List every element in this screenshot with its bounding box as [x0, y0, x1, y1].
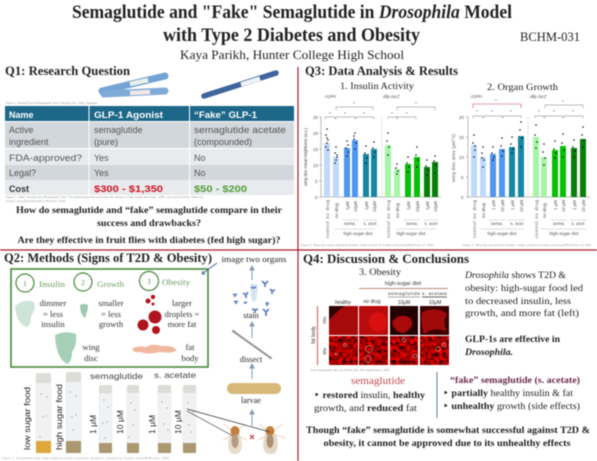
arrow to box	[202, 263, 217, 274]
bar chart: insulin activity: 5	[315, 179, 318, 184]
bar chart: insulin activity: s. acet	[425, 221, 438, 226]
research question text	[16, 205, 283, 246]
bar chart: insulin activity: 25	[313, 115, 318, 120]
comparison table: “Fake” GLP-1	[194, 110, 257, 120]
figure caption Q4: From photographs taken by Fredlet (20x, 40x magnification), 2025.	[311, 369, 390, 372]
bar chart: organ growth: 1 μM	[572, 200, 577, 210]
research question text: Are they effective in fruit flies with diabetes (fed high sugar)?	[18, 235, 281, 246]
bar chart: organ growth: control no drug	[534, 199, 539, 238]
icon: crossed flies	[187, 409, 286, 454]
icon: tweezers	[233, 331, 271, 358]
comparison table: Name	[9, 110, 34, 120]
panel: Q4 discussion and conclusions	[303, 251, 590, 449]
sign 2: growth	[74, 273, 125, 329]
semaglutide findings: semaglutide	[351, 376, 406, 387]
fat body micrograph grid: 10μM	[398, 300, 410, 306]
bar chart: insulin activity: 15	[313, 147, 318, 152]
vial labels: 10 μM	[173, 410, 183, 434]
sign 1: insulin: insulin	[41, 319, 65, 329]
project code: BCHM-031	[520, 30, 580, 44]
bar chart: organ growth: 5	[461, 175, 464, 180]
bar chart: insulin activity: *	[406, 111, 408, 116]
heading: Q3: Q3: Data Analysis & Results	[305, 63, 458, 78]
bar chart: organ growth: 10	[459, 155, 464, 160]
sign 3: obesity: 3	[147, 278, 151, 286]
discussion text	[464, 271, 583, 358]
bar chart: organ growth: control no drug	[472, 199, 477, 238]
comparison table: semaglutide	[94, 125, 143, 135]
bar chart: organ growth: rGPH	[471, 94, 483, 99]
bar chart: insulin activity: sema.	[406, 221, 418, 226]
discussion text: Drosophila.	[464, 348, 513, 358]
sign 3: obesity	[138, 272, 199, 334]
bar chart: insulin activity: 10μM	[353, 201, 358, 212]
bar chart: insulin activity: high-sugar diet	[343, 231, 373, 236]
semaglutide findings	[314, 376, 425, 414]
bar chart: organ growth: 15	[459, 135, 464, 140]
workflow labels	[222, 255, 286, 405]
title: Semaglutide and "Fake" Semaglutide in Drosophila Model	[72, 2, 512, 23]
bar chart: organ growth: s. acet	[511, 221, 524, 226]
bar chart: insulin activity: dilp-lacZ	[383, 94, 400, 99]
bar chart: insulin activity: 10μM	[433, 201, 438, 212]
figure captions Q3: Figure 4. Wing disc insulin signaling [Graph]. Graph created by Fredlet using GraphPad Prism 10, 2025.	[301, 244, 434, 247]
bar chart: organ growth	[451, 94, 590, 238]
bar chart: insulin activity: control no drug	[386, 199, 391, 238]
bar chart: insulin activity: *	[415, 101, 417, 106]
discussion text: to decreased insulin, less	[465, 297, 571, 307]
fat body label: fat	[185, 342, 195, 352]
vial labels: high sugar food	[54, 384, 64, 450]
comparison table: Active	[9, 125, 34, 135]
bar chart: organ growth: 1 μM	[553, 200, 558, 210]
bar chart: insulin activity: 10	[313, 163, 318, 168]
sign 1: insulin: = less	[43, 309, 64, 319]
bar chart: insulin activity: 1μM	[406, 201, 411, 210]
comparison table: (compounded)	[194, 137, 252, 147]
bar chart: organ growth: wing disc area (μm^2)	[451, 133, 456, 182]
green signs box	[11, 269, 208, 367]
sign 1: insulin: Insulin	[39, 279, 66, 289]
bar chart: organ growth: sema.	[491, 221, 503, 226]
icon: semaglutide pens	[102, 76, 165, 94]
bar chart: organ growth: sema.	[553, 221, 565, 226]
title	[72, 2, 512, 46]
comparison table: $50 - $200	[194, 184, 247, 194]
bar chart: insulin activity: 10μM	[372, 201, 377, 212]
bar chart: insulin activity: high-sugar diet	[396, 231, 426, 236]
fake semaglutide findings: ‣ partially healthy insulin & fat	[443, 388, 573, 399]
vial labels: low sugar food	[22, 387, 32, 450]
title: with Type 2 Diabetes and Obesity	[163, 25, 420, 46]
fat body micrograph grid: no drug	[364, 299, 381, 305]
comparison table: Legal?	[9, 168, 36, 178]
bar chart: organ growth: dilp-lacZ	[530, 94, 547, 99]
fake semaglutide findings: ‣ unhealthy growth (side effects)	[443, 401, 580, 412]
bar chart: insulin activity	[303, 94, 441, 238]
fat body micrograph grid	[311, 281, 449, 365]
bar chart: organ growth: s. acet	[572, 221, 585, 226]
bar chart: insulin activity: 10μM	[415, 201, 420, 212]
bar chart: insulin activity: 1μM	[345, 201, 350, 210]
sign 2: growth: Growth	[97, 279, 125, 289]
sign 1: insulin: 1	[23, 280, 27, 288]
conclusion: obesity, it cannot be approved due to its unhealthy effects	[324, 438, 571, 449]
bar chart: insulin activity: *	[363, 111, 365, 116]
semaglutide findings: ‣ restored insulin, healthy	[314, 391, 425, 401]
bar chart: insulin activity: *	[391, 111, 393, 116]
bar chart: organ growth: 20	[459, 115, 464, 120]
sign 2: growth: growth	[99, 319, 124, 329]
fat body micrograph grid: s. acetate	[422, 291, 447, 297]
bar chart: insulin activity: no drug	[334, 203, 339, 218]
fat body label	[132, 342, 199, 363]
discussion text: growth, and more fat (left)	[465, 308, 579, 319]
fat body micrograph grid: 40x	[322, 347, 327, 355]
workflow labels: larvae	[241, 396, 261, 405]
bar chart: organ growth: *	[476, 109, 478, 114]
comparison table: No	[194, 153, 206, 163]
sign 3: obesity: larger	[172, 298, 192, 308]
vial labels: 1 μM	[147, 415, 157, 434]
icon: larva	[227, 383, 281, 394]
comparison table: $300 - $1,350	[94, 184, 163, 194]
bar chart: organ growth: *	[562, 99, 564, 104]
comparison table: Yes	[94, 153, 109, 163]
bar chart: insulin activity: rGPH	[325, 94, 337, 99]
fat body micrograph grid: 10μM	[429, 300, 441, 306]
icon: antibodies and stain tube	[233, 281, 275, 316]
sign 2: growth: 2	[81, 279, 85, 287]
comparison table: GLP-1 Agonist	[94, 110, 163, 120]
panel: Q3 data analysis and results	[301, 63, 592, 247]
fat body micrograph grid: healthy	[335, 300, 352, 306]
fake semaglutide findings: “fake” semaglutide (s. acetate)	[450, 375, 580, 386]
bar chart: organ growth: 1 μM	[491, 200, 496, 210]
fat body micrograph grid: semaglutide	[388, 291, 420, 297]
comparison table: ingredient	[9, 137, 49, 147]
wing disc label: disc	[84, 353, 98, 363]
bar chart: organ growth: 10 μM	[561, 199, 566, 212]
bar chart: organ growth: 10 μM	[581, 199, 586, 212]
bar chart: organ growth: *	[572, 109, 574, 114]
bar chart: insulin activity: 1μM	[364, 201, 369, 210]
figure captions Q1	[6, 102, 204, 203]
bar chart: organ growth: 1 μM	[510, 200, 515, 210]
vial labels: semaglutide	[90, 371, 143, 381]
fat body micrograph grid: 20x	[322, 316, 327, 324]
bar chart: organ growth: 10 μM	[519, 199, 524, 212]
panel: Q1 research question	[5, 63, 294, 246]
vial labels: 10 μM	[115, 410, 125, 434]
conclusion	[306, 425, 590, 449]
workflow arrows	[250, 266, 254, 426]
sign 2: growth: smaller	[98, 298, 124, 308]
icon: fake semaglutide pen	[204, 73, 276, 96]
semaglutide findings: growth, and reduced fat	[314, 403, 417, 414]
comparison table: Yes	[94, 168, 109, 178]
fat body micrograph grid: fat body	[311, 326, 317, 344]
fat body label: body	[181, 353, 199, 363]
bar chart: insulin activity: 0	[315, 195, 318, 200]
heading: Q2: Q2: Methods (Signs of T2D & Obesity)	[4, 250, 212, 265]
discussion text: GLP-1s are effective in	[465, 335, 561, 345]
research question text: How do semaglutide and “fake” semaglutide compare in their	[16, 205, 283, 216]
bar chart: organ growth: *	[538, 109, 540, 114]
figure captions Q3: Figure 5. Wing disc development [Graph]. Graph created by Fredlet using GraphPad Prism 10, 2025.	[463, 244, 592, 247]
wing disc label: wing	[82, 342, 100, 352]
comparison table: semaglutide acetate	[194, 125, 286, 135]
bar chart: insulin activity: no drug	[395, 203, 400, 218]
bar chart: insulin activity: 1μM	[425, 201, 430, 210]
figure captions Q3	[301, 244, 592, 247]
figure captions Q1: Figure 1. Ozempic® pens [Photograph]. From "Ozempic Pen," 2024, Canadarx.	[6, 102, 98, 105]
bar chart: organ growth: no drug	[542, 203, 547, 218]
comparison table: Cost	[9, 184, 29, 194]
heading: Q1: Q1: Research Question	[5, 63, 131, 78]
comparison table	[5, 106, 294, 195]
discussion text: obesity: high-sugar food led	[465, 283, 583, 294]
sign 3: obesity: more fat	[168, 319, 197, 329]
bar chart: insulin activity: sema.	[344, 221, 356, 226]
bar chart: insulin activity: control no drug	[325, 199, 330, 238]
workflow labels: stain	[243, 311, 259, 320]
bar chart: organ growth: *	[553, 109, 555, 114]
bar chart: organ growth: 10 μM	[500, 199, 505, 212]
conclusion: Though “fake” semaglutide is somewhat successful against T2D &	[306, 425, 590, 436]
fake semaglutide findings	[443, 375, 580, 412]
fly vials	[36, 372, 196, 453]
bar chart: organ growth: high-sugar diet	[549, 231, 579, 236]
chart title: organ growth: 2. Organ Growth	[487, 83, 558, 93]
comparison table: No	[194, 168, 206, 178]
bar chart: insulin activity: *	[344, 111, 346, 116]
vial labels: 1 μM	[88, 415, 98, 434]
bar chart: insulin activity: *	[353, 101, 355, 106]
figure caption Q2: Figure 3. Drosophila high-sugar diabetes model procedure [Graphic]. Created by Fredlet using BioRender, 2025.	[2, 457, 170, 460]
bar chart: insulin activity: *	[329, 111, 331, 116]
fat body micrograph grid: high-sugar diet	[385, 281, 422, 287]
panel: Q2 methods	[2, 250, 286, 460]
bar chart: organ growth: high-sugar diet	[487, 231, 517, 236]
comparison table: FDA-approved?	[9, 153, 82, 163]
bar chart: insulin activity: wing disc mean brightness (a.u.)	[303, 127, 308, 186]
comparison table: (pure)	[94, 137, 118, 147]
chart title: insulin activity: 1. Insulin Activity	[340, 82, 414, 92]
bar chart: insulin activity: s. acet	[364, 221, 377, 226]
bar chart: organ growth: no drug	[481, 203, 486, 218]
bar chart: organ growth: *	[491, 109, 493, 114]
discussion text: Drosophila shows T2D &	[464, 271, 567, 281]
bar chart: organ growth: 0	[461, 195, 464, 200]
author line: Kaya Parikh, Hunter College High School	[180, 47, 404, 62]
sign 1: insulin: dimmer	[40, 298, 67, 308]
workflow labels: image two organs	[222, 255, 286, 264]
sign 3: obesity: Obesity	[162, 277, 191, 287]
sign 3: obesity: droplets =	[165, 309, 199, 319]
vial labels: s. acetate	[154, 370, 196, 380]
obesity subtitle: 3. Obesity	[359, 268, 401, 278]
figure captions Q1: Fredlet using BioInfoGraphics Remixer, 2025.	[6, 200, 66, 203]
sign 2: growth: = less	[101, 309, 122, 319]
bar chart: organ growth: *	[495, 98, 497, 103]
wing disc label	[55, 332, 100, 364]
bar chart: insulin activity: 20	[313, 131, 318, 136]
sign 1: insulin	[15, 274, 67, 329]
bar chart: organ growth: *	[510, 109, 512, 114]
heading: Q4: Q4: Discussion & Conclusions	[303, 251, 469, 266]
workflow labels: dissect	[240, 355, 263, 364]
figure captions Q1: Figure 2. "Fake" Ozempic pen [Photograph]. From "The alarming general trend about the dangers of fake weight loss drugs," 2025, Lisa Gerrand Press. Edited by	[6, 196, 204, 199]
research question text: success and drawbacks?	[97, 219, 201, 229]
vial labels	[22, 370, 196, 450]
